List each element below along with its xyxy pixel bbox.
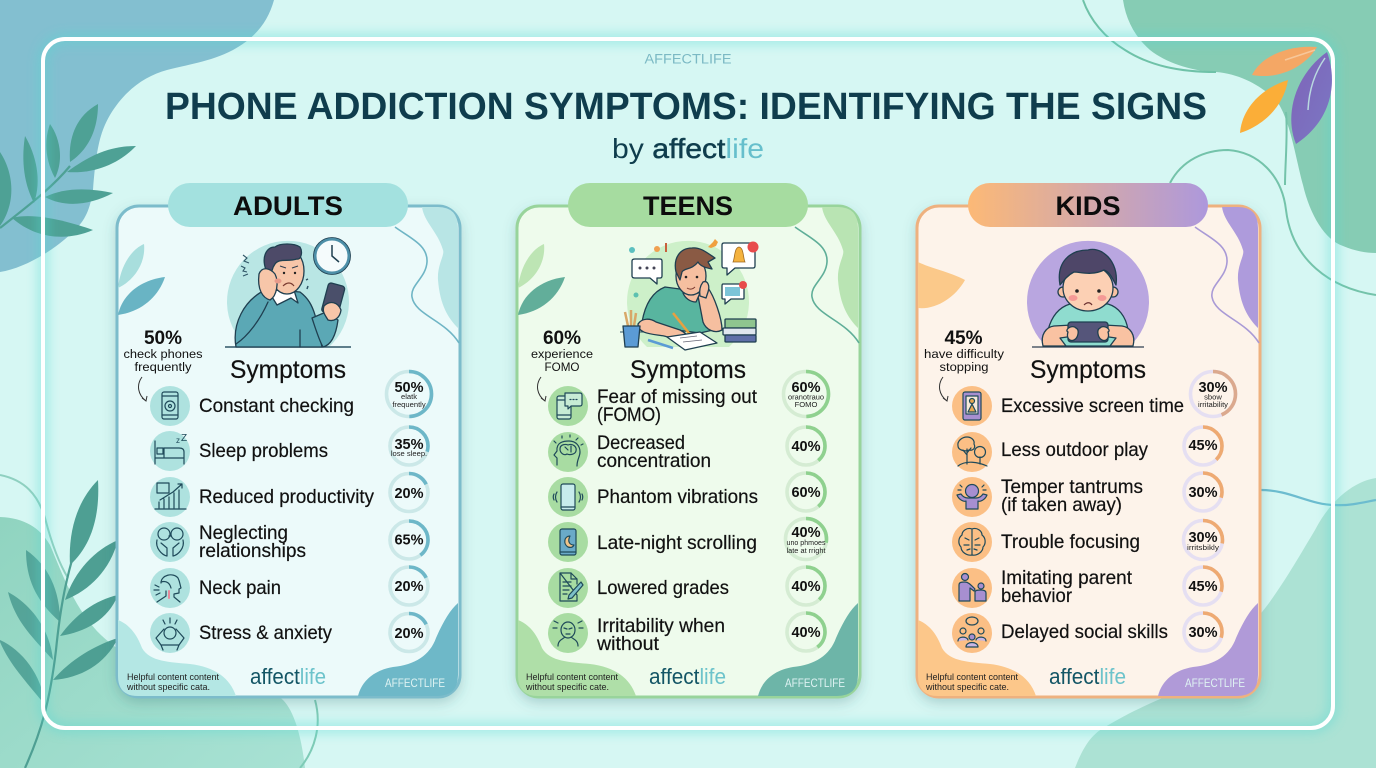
footer logo: affectlife	[250, 664, 326, 689]
row: trouble focusing: 30%	[1188, 530, 1218, 546]
footer note: without specific cata.	[126, 681, 210, 692]
row: fear of missing out: Fear of missing out	[597, 386, 758, 408]
row: neglecting relationships: 65%	[394, 532, 424, 548]
row: irritability when without: Irritability when	[597, 615, 725, 637]
brand tag: AFFECTLIFE	[644, 52, 732, 66]
row: excessive screen time: irritability	[1198, 400, 1228, 409]
callout: 45%	[924, 328, 1005, 401]
row: stress and anxiety: 20%	[394, 626, 424, 642]
pill heading	[968, 183, 1208, 227]
row: irritability when without: without	[596, 633, 660, 655]
row: late-night scrolling	[548, 518, 826, 562]
card decoration	[118, 207, 459, 696]
callout: 45%: 45%	[944, 328, 983, 349]
row: constant checking: 50%	[394, 380, 424, 396]
row: neglecting relationships	[150, 521, 428, 562]
footer note	[525, 671, 618, 692]
row: decreased concentration	[548, 427, 825, 472]
row: stress and anxiety: Stress & anxiety	[199, 622, 332, 644]
row: late-night scrolling: 40%	[791, 525, 821, 541]
footer logo: affectlife	[1049, 664, 1126, 689]
row: late-night scrolling: uno phmoes	[786, 538, 826, 547]
heading: symptoms: Symptoms	[630, 356, 746, 384]
row: fear of missing out: FOMO	[795, 400, 817, 409]
row: excessive screen time: Excessive screen time	[1001, 395, 1184, 417]
icon: wall clock	[314, 238, 350, 274]
row: constant checking: Constant checking	[199, 395, 354, 417]
footer logo: affectlife	[649, 664, 726, 689]
footer note: Helpful content content	[926, 671, 1018, 682]
row: excessive screen time: sbow	[1204, 392, 1222, 402]
row: constant checking: elatk	[401, 392, 417, 401]
row: temper tantrums: 30%	[1188, 485, 1218, 501]
illustration: child with tablet	[1027, 241, 1149, 347]
row: imitating parent behavior	[952, 567, 1222, 608]
row: decreased concentration: concentration	[597, 450, 711, 472]
row: lowered grades	[548, 567, 825, 608]
footer watermark: AFFECTLIFE	[785, 678, 845, 690]
leaves: bottom left branch	[0, 480, 118, 768]
card background	[117, 206, 460, 697]
callout: 50%: 50%	[144, 328, 182, 349]
footer note	[126, 671, 219, 692]
card background	[517, 206, 860, 697]
leaves: top left branch	[0, 104, 136, 237]
footer note: without specific cate.	[525, 681, 609, 692]
row: sleep problems: 35%	[394, 437, 424, 453]
callout: 60%	[531, 328, 593, 401]
icon: notification bell	[722, 242, 758, 275]
row: constant checking	[150, 372, 432, 426]
callout: 50%	[124, 328, 202, 401]
row: less outdoor play: Less outdoor play	[1001, 439, 1148, 461]
row: trouble focusing	[952, 520, 1222, 562]
row: neck pain: Neck pain	[199, 577, 281, 599]
row: sleep problems: z	[176, 436, 180, 445]
callout: 50%: frequently	[134, 360, 192, 374]
callout: 60%: experience	[531, 347, 593, 361]
row: late-night scrolling: late at rright	[786, 546, 826, 555]
row: irritability when without	[548, 613, 825, 655]
row: temper tantrums	[952, 473, 1222, 517]
row: lowered grades: 40%	[791, 579, 821, 595]
callout: 60%: 60%	[543, 328, 581, 349]
row: less outdoor play	[952, 427, 1222, 472]
pill heading	[568, 183, 808, 227]
row: delayed social skills	[952, 613, 1222, 653]
row: temper tantrums: (if taken away)	[1001, 494, 1122, 516]
row: late-night scrolling: Late-night scrolling	[597, 532, 757, 554]
row: fear of missing out: 60%	[791, 380, 821, 396]
row: reduced productivity: Reduced productivity	[199, 486, 374, 508]
row: neck pain: 20%	[394, 579, 424, 595]
row: excessive screen time: 30%	[1198, 380, 1228, 396]
row: delayed social skills: 30%	[1188, 625, 1218, 641]
title: PHONE ADDICTION SYMPTOMS: IDENTIFYING THE SIGNS	[165, 86, 1207, 128]
footer note: Helpful content content	[526, 671, 618, 682]
row: fear of missing out: oranotrauo	[788, 392, 824, 402]
row: reduced productivity	[150, 474, 428, 517]
row: neglecting relationships: Neglecting	[199, 522, 288, 544]
row: sleep problems: lose sleep.	[391, 449, 427, 458]
footer watermark: AFFECTLIFE	[385, 678, 445, 690]
illustration: teen distracted while studying	[620, 239, 756, 350]
subtitle: by affectlife	[612, 133, 764, 164]
row: stress and anxiety	[150, 613, 428, 653]
row: neglecting relationships: relationships	[199, 540, 306, 562]
pill heading: KIDS	[1056, 191, 1120, 221]
callout: 50%: check phones	[124, 347, 202, 361]
card decoration	[518, 207, 859, 696]
footer note	[925, 671, 1018, 692]
row: sleep problems	[150, 427, 428, 471]
row: fear of missing out: (FOMO)	[597, 404, 661, 426]
pill heading: TEENS	[643, 191, 733, 221]
row: phantom vibrations: 60%	[791, 485, 821, 501]
panel: kids	[917, 183, 1260, 697]
row: imitating parent behavior: behavior	[1001, 585, 1072, 607]
row: irritability when without: 40%	[791, 625, 821, 641]
row: fear of missing out	[548, 372, 828, 426]
row: decreased concentration: Decreased	[597, 432, 685, 454]
callout: 45%: have difficulty	[924, 347, 1005, 361]
row: lowered grades: Lowered grades	[597, 577, 729, 599]
heading: symptoms: Symptoms	[230, 356, 346, 384]
callout: 45%: stopping	[940, 360, 989, 374]
pill heading: ADULTS	[233, 191, 343, 221]
row: reduced productivity: 20%	[394, 486, 424, 502]
row: neck pain	[150, 567, 428, 608]
row: imitating parent behavior: Imitating parent	[1001, 567, 1133, 589]
row: trouble focusing: irritsbikly	[1187, 543, 1219, 552]
panel: adults	[117, 183, 460, 697]
pill heading	[168, 183, 408, 227]
row: trouble focusing: Trouble focusing	[1001, 531, 1140, 553]
row: constant checking: frequently	[392, 400, 426, 409]
card background	[917, 206, 1260, 697]
row: sleep problems: Z	[181, 433, 187, 444]
card decoration	[918, 207, 1259, 696]
panel: teens	[517, 183, 860, 697]
illustration: stressed man with phone	[225, 241, 351, 347]
footer note: Helpful content content	[127, 671, 219, 682]
row: excessive screen time	[952, 372, 1236, 426]
row: imitating parent behavior: 45%	[1188, 579, 1218, 595]
row: phantom vibrations	[548, 473, 825, 517]
row: phantom vibrations: Phantom vibrations	[597, 486, 758, 508]
footer watermark: AFFECTLIFE	[1185, 678, 1245, 690]
callout: 60%: FOMO	[544, 360, 580, 374]
icon: message alert	[722, 281, 747, 304]
row: temper tantrums: Temper tantrums	[1001, 476, 1143, 498]
row: sleep problems: Sleep problems	[199, 440, 328, 462]
row: decreased concentration: 40%	[791, 439, 821, 455]
row: delayed social skills: Delayed social skills	[1001, 621, 1168, 643]
icon: chat bubble	[632, 259, 662, 284]
footer note: without specific cate.	[925, 681, 1009, 692]
row: less outdoor play: 45%	[1188, 438, 1218, 454]
leaves: top right corner	[1240, 47, 1332, 144]
heading: symptoms: Symptoms	[1030, 356, 1146, 384]
